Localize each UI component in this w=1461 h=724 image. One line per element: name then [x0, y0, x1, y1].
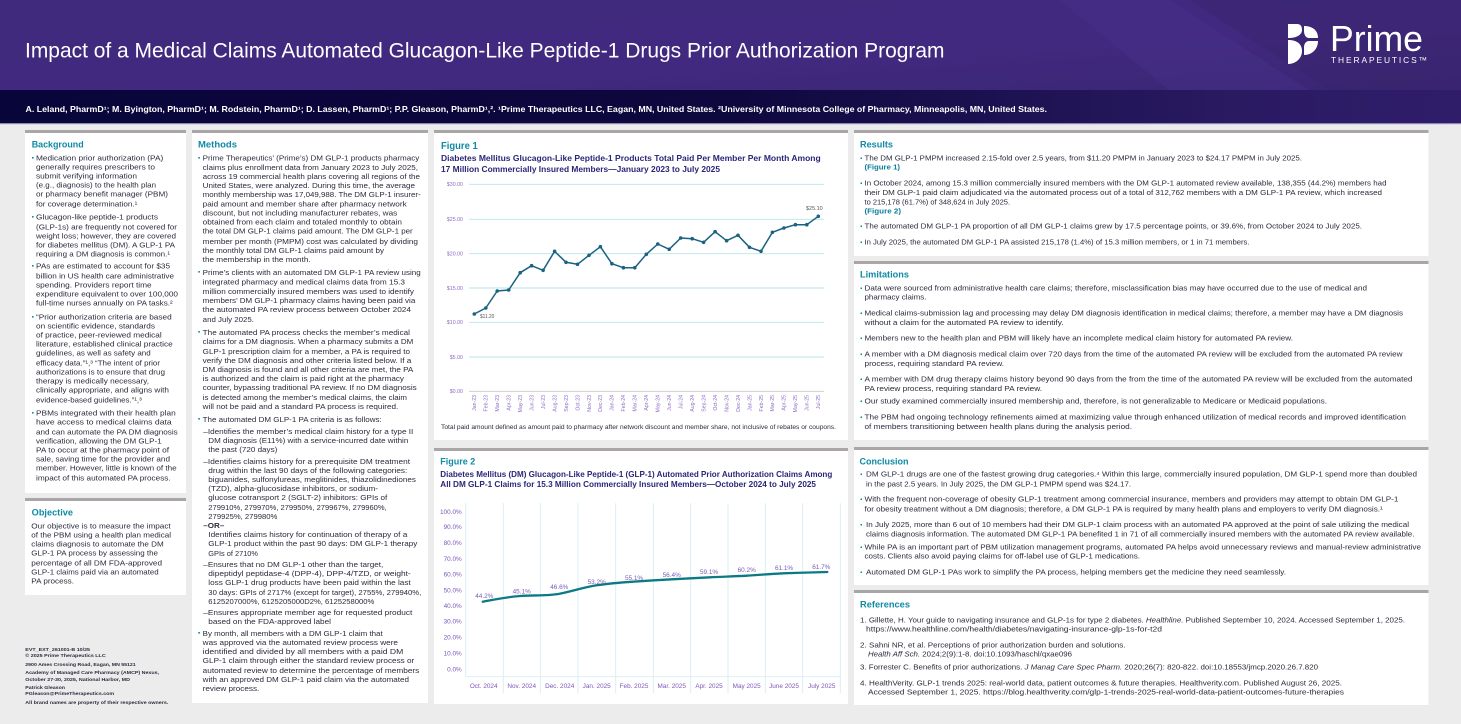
line chart: total paid PMPM: Jan-23 — [472, 395, 478, 411]
line chart: total paid PMPM: Nov-23 — [587, 395, 593, 412]
line chart: automated PA share: 10.0% — [444, 650, 462, 658]
conclusion text — [860, 470, 1421, 576]
line chart: automated PA share: 56.4% — [663, 572, 681, 579]
methods text: By month, all members with a DM GLP-1 claim that — [203, 629, 383, 638]
reference list: https://www.healthline.com/health/diabetes/navigating-insurance-glp-1s-for-t2d — [866, 624, 1162, 634]
background bullets: or pharmacy benefit manager (PBM) — [36, 190, 168, 198]
methods text: the past (720 days) — [208, 445, 277, 454]
header banner — [0, 0, 1461, 91]
methods text: biguanides, sulfonylureas, meglitinides, thiazolidinediones — [208, 475, 416, 484]
panel: figure 2 — [434, 448, 848, 704]
footer: poster details: Patrick Gleason — [25, 685, 65, 691]
methods text: –Identifies claims history for a prerequisite DM treatment — [203, 457, 410, 466]
results text: The DM GLP-1 PMPM increased 2.15-fold over 2.5 years, from $11.20 PMPM in January 2023 to $24.17 PMPM in July 2025. — [864, 154, 1302, 162]
line chart: automated PA share: Nov. 2024 — [507, 683, 536, 690]
objective text: percentage of all DM FDA-approved — [31, 558, 162, 568]
methods text: review process. — [203, 684, 259, 693]
conclusion text: for obesity treatment without a DM diagnosis; therefore, a DM GLP-1 PA is required by many health plans and employers to verify DM diagnosis.¹ — [864, 504, 1383, 514]
line chart: total paid PMPM: Feb-23 — [484, 395, 490, 411]
line chart: automated PA share — [440, 503, 840, 693]
results text: The automated DM GLP-1 PA proportion of all DM GLP-1 claims grew by 17.5 percentage points, or 39.6%, from October 2024 to July 2025. — [864, 222, 1362, 230]
line chart: automated PA share: 80.0% — [444, 540, 462, 547]
line chart: automated PA share: 60.0% — [444, 572, 462, 578]
objective text: of the PBM using a health plan medical — [31, 530, 171, 540]
methods text: glucose cotransport 2 (SGLT-2) inhibitors: GPIs of — [208, 493, 388, 502]
limitations text: Members new to the health plan and PBM will likely have an incomplete medical claim history for automated PA review. — [864, 334, 1293, 342]
limitations text: PA review process, requiring standard PA review. — [864, 384, 1042, 393]
limitations text — [860, 284, 1412, 431]
methods text: automated review to determine the percentage of members — [203, 666, 420, 675]
line chart: automated PA share: 100.0% — [440, 509, 462, 516]
line chart: total paid PMPM: Oct-24 — [713, 395, 719, 411]
line chart: total paid PMPM: Dec-23 — [598, 395, 604, 412]
line chart: automated PA share: 40.0% — [444, 603, 462, 610]
background bullets: (e.g., diagnosis) to the health plan — [36, 180, 156, 190]
footer: poster details — [25, 647, 169, 706]
methods text: monthly membership was 17,049,988. The DM GLP-1 insurer- — [203, 190, 421, 199]
line chart: total paid PMPM: $11.20 — [480, 314, 494, 320]
heading: background: Background — [32, 140, 84, 150]
heading: figure 2: Figure 2 — [440, 456, 475, 468]
methods text: the monthly total DM GLP-1 claims paid amount by — [203, 246, 384, 255]
line chart: automated PA share: June 2025 — [769, 683, 799, 690]
line chart: automated PA share: Mar. 2025 — [657, 683, 686, 690]
methods text: DM diagnosis (E11%) with a service-incurred date within — [208, 436, 408, 445]
methods text: dipeptidyl peptidase-4 (DPP-4), DPP-4/TZD, or weight- — [208, 569, 411, 578]
background bullets: for coverage determination.¹ — [36, 200, 138, 208]
methods text: will not be paid and a standard PA process is required. — [202, 402, 398, 411]
panel: objective — [25, 498, 186, 595]
methods text: 279910%, 279970%, 279950%, 279967%, 279960%, — [208, 503, 387, 512]
methods text: members’ DM GLP-1 pharmacy claims having been paid via — [203, 296, 416, 305]
methods text: obtained from each claim and totaled monthly to obtain — [203, 218, 402, 226]
line chart: automated PA share: 61.7% — [812, 564, 831, 571]
line chart: total paid PMPM: Apr-24 — [644, 395, 650, 411]
results text: to 215,178 (61.7%) of 348,624 in July 2025. — [864, 198, 1010, 206]
line chart: automated PA share: July 2025 — [808, 683, 836, 690]
background bullets: efficacy data.”¹,³ “The intent of prior — [36, 358, 161, 368]
line chart: total paid PMPM: Aug-24 — [690, 395, 696, 412]
methods text: –Ensures appropriate member age for requested product — [203, 608, 412, 617]
background bullets: literature, established clinical practice — [36, 340, 173, 348]
methods text: is authorized and the claim is paid right at the pharmacy — [203, 374, 404, 383]
methods text: The automated PA process checks the member’s medical — [203, 328, 410, 337]
reference list — [860, 616, 1405, 696]
line chart: total paid PMPM: Sep-23 — [564, 395, 570, 412]
heading: figure 1: Figure 1 — [441, 141, 478, 152]
line chart: total paid PMPM: $10.00 — [447, 320, 463, 326]
objective text: GLP-1 claims paid via an automated — [31, 568, 159, 576]
reference list: Health Aff Sch. 2024;2(9):1-8. doi:10.1093/haschl/qxae096 — [868, 650, 1072, 658]
line chart: total paid PMPM: Jan-24 — [610, 395, 616, 411]
line chart: automated PA share: 0.0% — [447, 666, 462, 674]
methods text: 279925%, 279980% — [208, 512, 278, 521]
methods text: member per month (PMPM) cost was calculated by dividing — [203, 237, 418, 246]
line chart: total paid PMPM: May-24 — [656, 395, 662, 412]
methods text — [198, 154, 421, 693]
limitations text: The PBM had ongoing technology refinements aimed at maximizing value through enhanced utilization of medical records and improved identification — [864, 412, 1406, 422]
methods text: GLP-1 claim through either the standard review process or — [203, 656, 415, 665]
background bullets: member. However, little is known of the — [36, 464, 177, 472]
methods text: claims for a DM diagnosis. When a pharmacy submits a DM — [203, 337, 413, 346]
line chart: automated PA share: Oct. 2024 — [470, 683, 498, 690]
methods text: verify the DM diagnosis and other criteria listed below. If a — [203, 356, 412, 365]
results text: (Figure 2) — [864, 206, 902, 216]
background bullets: expenditure equivalent to over 100,000 — [36, 290, 178, 298]
background bullets: have access to medical claims data — [36, 418, 173, 426]
methods text: across 19 commercial health plans covering all regions of the — [203, 172, 420, 181]
footer: poster details: All brand names are property of their respective owners. — [25, 700, 169, 706]
line chart: total paid PMPM: Feb-24 — [621, 395, 627, 411]
panel: references — [854, 590, 1428, 705]
line chart: total paid PMPM: $15.00 — [447, 286, 463, 292]
line chart: automated PA share: 59.1% — [700, 569, 718, 576]
line chart: automated PA share: Apr. 2025 — [695, 683, 723, 690]
background bullets: and can automate the PA DM diagnosis — [36, 428, 178, 436]
line chart: automated PA share: 20.0% — [444, 634, 462, 642]
line chart: total paid PMPM: Jan-25 — [747, 395, 753, 411]
background bullets: full-time nurses annually on PA tasks.² — [36, 298, 173, 308]
figure 2 subtitle — [440, 470, 832, 489]
reference list: 3. Forrester C. Benefits of prior authorizations. J Manag Care Spec Pharm. 2020;26(7): 820-822. doi:10.18553/jmcp.2020.26.7.820 — [860, 662, 1318, 672]
methods text: GPIs of 2710% — [208, 549, 258, 558]
line chart: automated PA share: Dec. 2024 — [545, 683, 575, 690]
background bullets: clinically appropriate, and aligns with — [36, 386, 169, 394]
methods text: identified and divided by all members with a paid DM — [203, 647, 403, 656]
methods text: Identifies claims history for continuation of therapy of a — [208, 530, 408, 539]
line chart: automated PA share: 61.1% — [775, 565, 793, 572]
line chart: total paid PMPM: Mar-25 — [770, 395, 776, 411]
methods text: GLP-1 prescription claim for a member, a PA is required to — [203, 347, 410, 356]
background bullets: therapy is medically necessary, — [36, 376, 149, 386]
reference list: 2. Sahni NR, et al. Perceptions of prior authorization burden and solutions. — [860, 640, 1126, 650]
reference list: Accessed September 1, 2025. https://blog.healthverity.com/glp-1-trends-2025-real-world-data-patient-outcomes-future-therapies — [868, 688, 1344, 696]
objective text: claims diagnosis to automate the DM — [31, 540, 164, 548]
line chart: total paid PMPM: Jun-23 — [529, 395, 535, 411]
methods text: counter, bypassing traditional PA review. If no DM diagnosis — [203, 383, 417, 392]
line chart: automated PA share: Jan. 2025 — [583, 683, 611, 690]
results text: In July 2025, the automated DM GLP-1 PA assisted 215,178 (1.4%) of 15.3 million members, or 1 in 71 members. — [864, 238, 1250, 246]
objective text: GLP-1 PA process by assessing the — [31, 548, 158, 558]
methods text: and July 2025. — [203, 315, 254, 324]
background bullets: PBMs integrated with their health plan — [36, 408, 176, 418]
results text — [860, 154, 1386, 246]
line chart: automated PA share: 50.0% — [444, 588, 462, 594]
background bullets: for diabetes mellitus (DM). A GLP-1 PA — [36, 240, 175, 250]
conclusion text: With the frequent non-coverage of obesity GLP-1 treatment among commercial insurance, members and providers may attempt to obtain DM GLP-1 — [864, 494, 1398, 504]
footer: poster details: October 27-30, 2025, National Harbor, MD — [25, 677, 131, 683]
conclusion text: DM GLP-1 drugs are one of the fastest growing drug categories.⁴ Within this large, commercially insured population, DM GLP-1 spend more than doubled — [866, 470, 1417, 478]
methods text: (TZD), alpha-glucosidase inhibitors, or sodium- — [208, 484, 379, 493]
line chart: total paid PMPM: May-25 — [793, 395, 799, 412]
limitations text: process, requiring standard PA review. — [864, 359, 1004, 368]
background bullets: sale, saving time for the provider and — [36, 454, 170, 464]
methods text: with an approved DM GLP-1 paid claim via the automated — [202, 675, 409, 684]
author bar: A. Leland, PharmD¹; M. Byington, PharmD¹; M. Rodstein, PharmD¹; D. Lassen, PharmD¹; P.P. Gleason, PharmD¹,². ¹Prime Therapeutics LLC, Eagan, MN, United States. ²University of Minnesota College of Pharmacy, Minneapolis, MN, United States. — [26, 105, 1047, 114]
methods text: drug within the last 90 days of the following categories: — [208, 466, 407, 475]
objective text: Our objective is to measure the impact — [31, 522, 171, 530]
heading: results: Results — [860, 140, 893, 150]
line chart: automated PA share: 70.0% — [444, 556, 462, 563]
line chart: total paid PMPM: Apr-25 — [782, 395, 788, 411]
line chart: total paid PMPM: $30.00 — [447, 182, 463, 188]
methods text: 30 days: GPIs of 2717% (except for target), 2755%, 279940%, — [208, 588, 421, 597]
methods text: Prime Therapeutics’ (Prime’s) DM GLP-1 products pharmacy — [203, 154, 420, 162]
line chart: total paid PMPM: $25.00 — [447, 217, 463, 223]
methods text: –Identifies the member’s medical claim history for a type II — [203, 427, 413, 436]
background bullets: Glucagon-like peptide-1 products — [36, 212, 158, 222]
line chart: total paid PMPM: $0.00 — [450, 389, 463, 395]
logo: Prime Therapeutics: Prime — [1330, 18, 1423, 59]
heading: references: References — [860, 600, 910, 610]
limitations text: Data were sourced from administrative health care claims; therefore, misclassification bias may have occurred due to the use of medical and — [864, 284, 1367, 292]
footer: poster details: EVT_EXT_261001-B 10/25 — [25, 647, 90, 653]
author bar — [0, 90, 1461, 124]
conclusion text: While PA is an important part of PBM utilization management programs, automated PA helps avoid unnecessary reviews and manual-review administrative — [864, 542, 1421, 552]
background bullets: submit verifying information — [36, 172, 137, 180]
line chart: total paid PMPM: Sep-24 — [701, 395, 707, 412]
line chart: automated PA share: 45.1% — [513, 588, 531, 596]
methods text: integrated pharmacy and medical claims data from 15.3 — [203, 278, 405, 286]
limitations text: Medical claims-submission lag and processing may delay DM diagnosis identification in medical claims; therefore, a member may have a DM diagnosis — [864, 308, 1403, 318]
title: Impact of a Medical Claims Automated Glucagon-Like Peptide-1 Drugs Prior Authorization Program — [25, 40, 944, 62]
background bullets: billion in US health care administrative — [36, 272, 174, 280]
line chart: total paid PMPM: Dec-24 — [736, 395, 742, 412]
methods text: the membership in the month. — [203, 255, 311, 264]
background bullets: weight loss; however, they are covered — [35, 232, 176, 240]
reference list: 4. HealthVerity. GLP-1 trends 2025: real-world data, patient outcomes & future therapies. Healthverity.com. Published August 26, 2025. — [860, 678, 1342, 688]
line chart: total paid PMPM: Aug-23 — [552, 395, 558, 412]
line chart: automated PA share: 90.0% — [444, 524, 462, 531]
conclusion text: claims diagnosis information. The automated DM GLP-1 PA benefited 1 in 71 of all commercially insured members with the automated PA review available. — [866, 530, 1414, 538]
reference list: 1. Gillette, H. Your guide to navigating insurance and GLP-1s for type 2 diabetes. Healthline. Published September 10, 2024. Accessed September 1, 2025. — [860, 616, 1405, 624]
background bullets: PAs are estimated to account for $35 — [36, 262, 170, 270]
line chart: total paid PMPM: Feb-25 — [759, 395, 765, 411]
conclusion text: In July 2025, more than 6 out of 10 members had their DM GLP-1 claim process with an automated PA approved at the point of sale utilizing the medical — [866, 520, 1409, 529]
footer: poster details: PGleason@PrimeTherapeutics.com — [25, 691, 115, 697]
footer: poster details: Academy of Managed Care Pharmacy (AMCP) Nexus, — [25, 670, 160, 676]
footer: poster details: 2900 Ames Crossing Road, Eagan, MN 55121 — [25, 662, 136, 668]
results text: their DM GLP-1 paid claim adjudicated via the automated process out of a total of 312,762 members with a DM GLP-1 PA review, which increased — [864, 188, 1382, 197]
figure 1 subtitle: Diabetes Mellitus Glucagon-Like Peptide-1 Products Total Paid Per Member Per Month Among — [441, 154, 821, 163]
heading: objective: Objective — [32, 508, 73, 518]
limitations text: A member with DM drug therapy claims history beyond 90 days from the from the time of the automated PA review will be excluded from the automated — [864, 374, 1412, 384]
methods text: –Ensures that no DM GLP-1 other than the target, — [203, 560, 383, 569]
figure 1 subtitle — [441, 154, 821, 174]
methods text: is detected among the member’s medical claims, the claim — [203, 393, 407, 402]
panel: conclusion — [854, 447, 1428, 585]
conclusion text: Automated DM GLP-1 PAs work to simplify the PA process, helping members get the medicine they need seamlessly. — [866, 568, 1286, 576]
panel: methods — [192, 130, 428, 703]
methods text: United States, were analyzed. During this time, the average — [203, 181, 415, 190]
line chart: automated PA share: May 2025 — [733, 683, 761, 690]
methods text: The automated DM GLP-1 PA criteria is as follows: — [203, 415, 382, 424]
line chart: total paid PMPM: Oct-23 — [575, 395, 581, 411]
line chart: automated PA share: 60.2% — [738, 567, 756, 574]
line chart: automated PA share: 55.1% — [625, 575, 643, 582]
background bullets: impact of this automated PA process. — [36, 474, 171, 482]
heading: limitations: Limitations — [860, 270, 909, 280]
line chart: total paid PMPM: Nov-24 — [724, 395, 730, 412]
line chart: total paid PMPM: $5.00 — [450, 355, 463, 361]
panel: figure 1 — [434, 130, 848, 440]
line chart: automated PA share: 46.6% — [550, 584, 569, 591]
line chart: total paid PMPM: Mar-23 — [495, 395, 501, 411]
figure 2 subtitle: All DM GLP-1 Claims for 15.3 Million Commercially Insured Members—October 2024 to July 2025 — [440, 480, 816, 489]
methods text: 6125207000%, 6125205000D2%, 6125258000% — [208, 597, 375, 606]
line chart: total paid PMPM: Jun-24 — [667, 395, 673, 411]
figure 2 subtitle: Diabetes Mellitus (DM) Glucagon-Like Peptide-1 (GLP-1) Automated Prior Authorization Claims Among — [440, 470, 832, 479]
methods text: discount, but not including manufacturer rebates, was — [203, 208, 398, 218]
logo: Prime Therapeutics — [1288, 18, 1427, 65]
line chart: total paid PMPM: Jul-25 — [816, 395, 822, 409]
methods text: DM diagnosis is found and all other criteria are met, the PA — [203, 365, 413, 374]
heading: methods: Methods — [198, 140, 237, 150]
results text: In October 2024, among 15.3 million commercially insured members with the DM GLP-1 automated review available, 138,355 (44.2%) members had — [864, 178, 1386, 188]
methods text: Prime’s clients with an automated DM GLP-1 PA review using — [203, 268, 421, 277]
objective text: PA process. — [31, 576, 74, 586]
methods text: GLP-1 product within the past 90 days: DM GLP-1 therapy — [208, 539, 418, 548]
methods text: was approved via the automated review process were — [202, 638, 398, 647]
background bullets: on scientific evidence, standards — [36, 322, 155, 330]
limitations text: without a claim for the automated PA review to identify. — [863, 318, 1064, 327]
figure 1 subtitle: 17 Million Commercially Insured Members—January 2023 to July 2025 — [441, 165, 720, 174]
methods text: million commercially insured members was used to identify — [203, 287, 414, 296]
line chart: automated PA share: 44.2% — [475, 593, 494, 600]
background bullets: spending. Providers report time — [36, 280, 152, 290]
panel: limitations — [854, 261, 1428, 440]
background bullets: generally requires prescribers to — [36, 162, 155, 172]
results text: (Figure 1) — [864, 162, 901, 172]
background bullets: of practice, peer-reviewed medical — [36, 330, 162, 340]
limitations text: A member with a DM diagnosis medical claim over 720 days from the time of the automated PA review will be excluded from the automated PA review — [864, 350, 1403, 358]
line chart: automated PA share: Feb. 2025 — [620, 683, 649, 690]
background bullets: verification, allowing the DM GLP-1 — [36, 436, 162, 446]
figure 1 footnote: Total paid amount defined as amount paid to pharmacy after network discount and member share, not inclusive of rebates or coupons. — [441, 424, 836, 431]
line chart: total paid PMPM: Apr-23 — [506, 395, 512, 411]
objective text — [31, 522, 171, 586]
line chart: total paid PMPM: $20.00 — [447, 252, 463, 258]
background bullets: PA to occur at the pharmacy point of — [36, 446, 170, 454]
line chart: total paid PMPM: Jul-24 — [678, 395, 684, 409]
limitations text: of members transitioning between health plans during the analysis period. — [864, 422, 1132, 431]
line chart: automated PA share: 53.2% — [588, 579, 606, 586]
logo: Prime Therapeutics: THERAPEUTICS™ — [1331, 55, 1427, 65]
line chart: total paid PMPM: Jul-23 — [541, 395, 547, 409]
panel: background — [25, 130, 186, 493]
background bullets — [32, 154, 178, 482]
limitations text: Our study examined commercially insured membership and, therefore, is not generalizable to Medicare or Medicaid populations. — [864, 396, 1327, 406]
limitations text: pharmacy claims. — [864, 292, 926, 302]
methods text: the total DM GLP-1 claims paid amount. The DM GLP-1 per — [203, 226, 413, 236]
line chart: total paid PMPM — [447, 182, 824, 412]
background bullets: evidence-based guidelines.”¹,³ — [36, 396, 142, 404]
background bullets: Medication prior authorization (PA) — [36, 154, 163, 162]
methods text: –OR– — [203, 521, 224, 530]
line chart: automated PA share: 30.0% — [444, 618, 462, 626]
methods text: claims plus enrollment data from January 2023 to July 2025, — [203, 163, 418, 172]
line chart: total paid PMPM: Mar-24 — [633, 395, 639, 411]
line chart: total paid PMPM: Jun-25 — [805, 395, 811, 411]
methods text: loss GLP-1 drug products have been paid within the last — [208, 578, 411, 587]
methods text: paid amount and member share after pharmacy network — [203, 200, 407, 208]
methods text: based on the FDA-approved label — [208, 617, 331, 626]
heading: conclusion: Conclusion — [860, 456, 908, 466]
background bullets: (GLP-1s) are frequently not covered for — [36, 222, 178, 232]
panel: results — [854, 130, 1428, 256]
conclusion text: costs. Clients also avoid paying claims for off-label use of GLP-1 medications. — [864, 552, 1140, 560]
background bullets: requiring a DM diagnosis is common.¹ — [36, 250, 171, 258]
methods text: the automated PA review process between October 2024 — [203, 305, 411, 314]
footer: poster details: © 2025 Prime Therapeutics LLC — [25, 652, 106, 659]
line chart: total paid PMPM: May-23 — [518, 395, 524, 412]
conclusion text: in the past 2.5 years. In July 2025, the DM GLP-1 PMPM spend was $24.17. — [866, 480, 1131, 488]
background bullets: “Prior authorization criteria are based — [36, 312, 172, 322]
background bullets: guidelines, as well as safety and — [36, 348, 151, 358]
line chart: total paid PMPM: $25.10 — [806, 206, 823, 212]
background bullets: authorizations is to ensure that drug — [36, 368, 165, 376]
